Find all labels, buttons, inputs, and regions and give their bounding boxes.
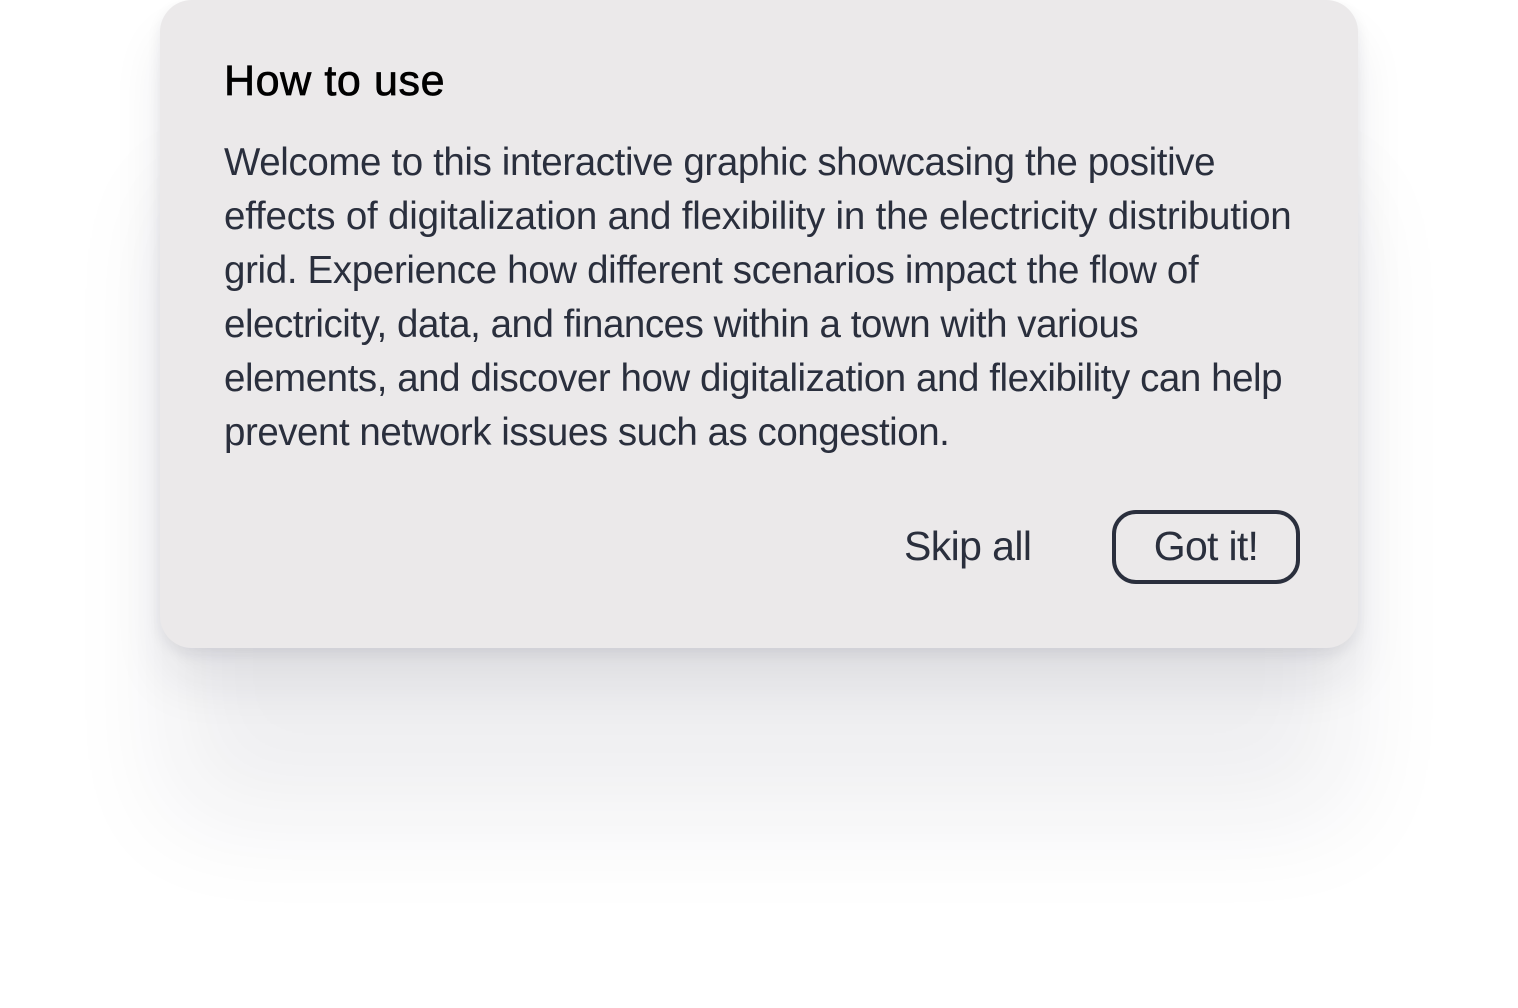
button: got it	[1112, 510, 1300, 584]
button: skip all: Skip all	[904, 523, 1031, 569]
text block: welcome description: effects of digitalization and flexibility in the electricity distribution	[224, 195, 1292, 238]
heading: how to use: How to use	[224, 57, 445, 105]
text block: welcome description	[224, 141, 1292, 454]
panel: how to use dialog card	[160, 0, 1358, 648]
text block: welcome description: electricity, data, and finances within a town with various	[224, 303, 1138, 346]
text block: welcome description: elements, and discover how digitalization and flexibility can help	[224, 357, 1282, 400]
button: got it: Got it!	[1154, 523, 1258, 569]
text block: welcome description: grid. Experience how different scenarios impact the flow of	[224, 249, 1198, 292]
text block: welcome description: prevent network issues such as congestion.	[224, 411, 949, 454]
text block: welcome description: Welcome to this interactive graphic showcasing the positive	[224, 141, 1215, 184]
